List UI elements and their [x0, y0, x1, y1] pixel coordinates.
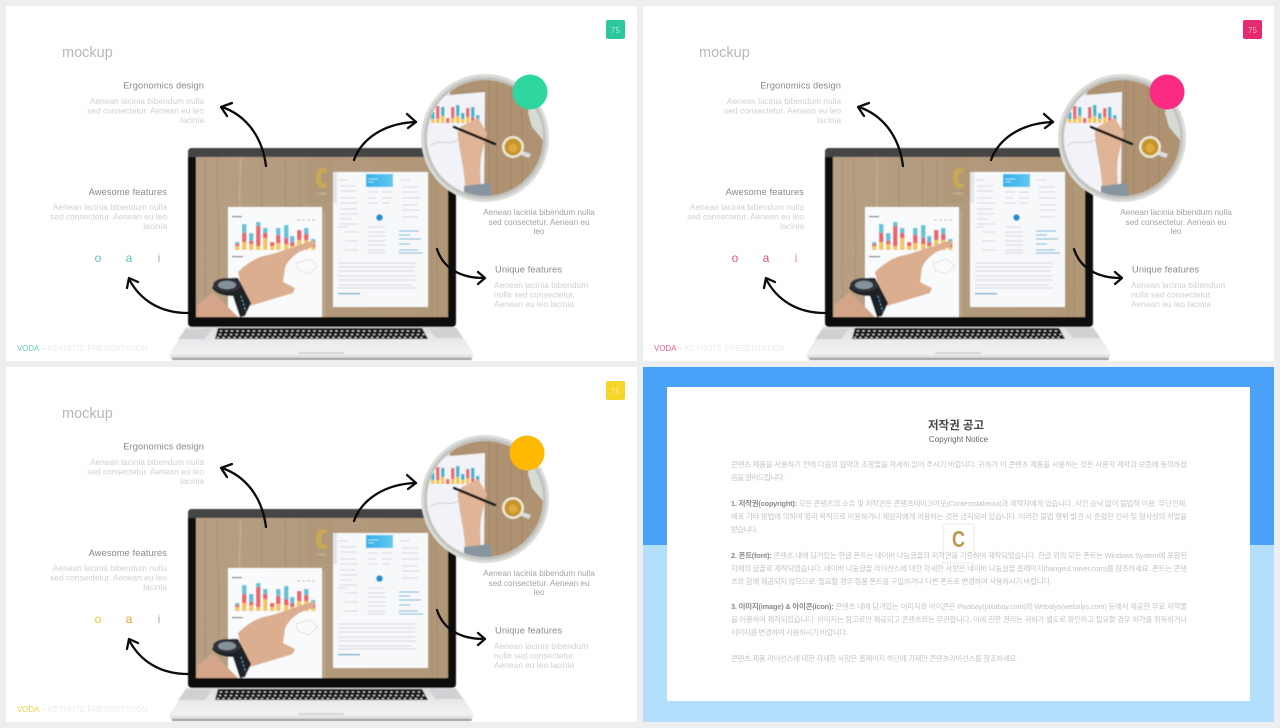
footer: VODA – KEYNOTE PRESENTATION	[17, 705, 148, 714]
text block: Unique features: Aenean eu leo lacinia	[494, 660, 574, 670]
text block: Ergonomics design: sed consectetur. Aenean eu leo	[87, 466, 204, 476]
caption under circle: sed consectetur. Aenean eu	[488, 218, 590, 227]
text block: Ergonomics design: sed consectetur. Aenean eu leo	[87, 106, 204, 116]
panel: slide 1 green	[6, 6, 637, 361]
text block: Awesome features: sed consectetur. Aenean eu leo	[50, 212, 167, 222]
page badge	[606, 20, 625, 39]
laptop mockup	[170, 148, 473, 360]
letters: o a i: o	[732, 251, 739, 265]
laptop mockup	[807, 148, 1110, 360]
text block: Awesome features: Aenean lacinia bibendum nulla	[690, 202, 804, 212]
notice body text: 배포 기타 방법에 의하여 영리 목적으로 이용하거나 제삼자에게 이용하는 것은 금지되어 있습니다. 이러한 불법 행위 발견 시 준엄한 민사 및 형사상의 처벌을	[731, 512, 1187, 521]
notice body text: 을 이용하여 제작되었습니다. 이미지는 참고로만 제공되고 콘텐츠와는 무관합니다. 이에 관한 권리는 귀하가 별도로 확인하고 필요할 경우 허가를 취득하거나	[731, 615, 1187, 624]
text block: Ergonomics design: Ergonomics design	[123, 442, 204, 452]
magnified circle	[1058, 74, 1186, 202]
laptop mockup	[170, 509, 473, 721]
text block: Ergonomics design: Aenean lacinia bibendum nulla	[727, 96, 841, 106]
title: mockup: mockup	[62, 406, 113, 422]
magnified circle	[421, 435, 549, 563]
notice heading: Copyright Notice	[929, 435, 989, 444]
text block: Awesome features: Awesome features	[89, 187, 167, 197]
notice body text: 츠와 함께 제공되지 않으므로, 필요할 경우 정품 폰트를 구입하거나 다른 폰트로 변경하여 사용하시기 바랍니다.	[731, 577, 1052, 586]
text block: Unique features: Aenean eu leo lacinia	[1131, 299, 1211, 309]
text block: Awesome features: Aenean lacinia bibendum nulla	[53, 202, 167, 212]
notice body text: 받습니다.	[731, 525, 758, 534]
text block: Unique features: nulla sed consectetur.	[494, 290, 575, 300]
letters: o a i	[95, 612, 160, 626]
text block: Awesome features: lacinia	[780, 221, 804, 231]
arrow: to Awesome features	[764, 278, 825, 313]
notice body text: 음을 알려드립니다.	[731, 473, 785, 482]
caption under circle	[483, 569, 595, 597]
notice body text	[731, 460, 1187, 663]
caption under circle: sed consectetur. Aenean eu	[488, 579, 590, 588]
text block: Ergonomics design	[87, 442, 204, 486]
title: mockup: mockup	[62, 45, 113, 61]
title: mockup: mockup	[699, 45, 750, 61]
page badge	[606, 381, 625, 400]
arrow: to Awesome features	[127, 278, 188, 313]
arrow: to magnified circle	[991, 114, 1053, 160]
page badge: 75	[611, 387, 620, 396]
caption under circle: leo	[1171, 227, 1182, 236]
watermark: C logo	[943, 524, 974, 563]
arrow: to magnified circle	[354, 114, 416, 160]
arrow: to Unique features	[437, 610, 485, 645]
page badge	[1243, 20, 1262, 39]
letters: o a i: i	[795, 251, 797, 265]
text block: Unique features: Aenean lacinia bibendum	[494, 641, 588, 651]
text block: Awesome features	[687, 187, 804, 231]
text block: Awesome features: Aenean lacinia bibendum nulla	[53, 563, 167, 573]
notice body text: 2. 폰트(font): 콘텐츠 내에 담겨있는 한글 폰트는 네이버 나눔글꼴의 저작권을 기증하여 제작되었습니다. 한글 외의 모든 폰트는 Windows System에 포함된	[731, 551, 1187, 560]
text block: Awesome features: Awesome features	[89, 548, 167, 558]
text block: Ergonomics design: Ergonomics design	[123, 80, 204, 90]
caption under circle: Aenean lacinia bibendum nulla	[1120, 208, 1232, 217]
notice body text: 1. 저작권(copyright): 모든 콘텐츠의 소유 및 저작권은 콘텐츠테이크아웃(Contentstakeout)과 제작자에게 있습니다. 사전 승낙 없이 불법적 이용, 무단전재,	[731, 499, 1187, 508]
caption under circle: sed consectetur. Aenean eu	[1125, 218, 1227, 227]
text block: Awesome features	[50, 548, 167, 592]
caption under circle: Aenean lacinia bibendum nulla	[483, 208, 595, 217]
page badge: 75	[1248, 26, 1257, 35]
text block: Unique features: nulla sed consectetur.	[1131, 290, 1212, 300]
letters: o a i: a	[126, 251, 133, 265]
text block: Awesome features	[50, 187, 167, 231]
arrow: to Awesome features	[127, 639, 188, 674]
watermark: C logo: C	[952, 526, 965, 552]
text block: Unique features: Aenean lacinia bibendum	[1131, 280, 1225, 290]
text block: Unique features	[1131, 264, 1225, 309]
text block: Ergonomics design	[87, 80, 204, 125]
accent dot	[512, 74, 548, 110]
letters: o a i: o	[95, 612, 102, 626]
text block: Awesome features: Awesome features	[726, 187, 804, 197]
panel: slide 2 pink	[643, 6, 1274, 361]
notice body text: 자체의 글꼴로 제작되었습니다. 네이버 나눔글꼴 라이선스에 대한 자세한 사항은 네이버 나눔글꼴 홈페이지(hangeul.naver.com)를 참조하세요. 폰트는 콘텐	[731, 564, 1187, 573]
letters: o a i: a	[763, 251, 770, 265]
caption under circle: leo	[534, 227, 545, 236]
text block: Unique features: Unique features	[495, 264, 562, 274]
text block: Ergonomics design: lacinia	[180, 115, 204, 125]
magnified circle	[421, 74, 549, 202]
letters: o a i: o	[95, 251, 102, 265]
footer: VODA – KEYNOTE PRESENTATION	[17, 344, 148, 353]
arrow: to Unique features	[1074, 249, 1122, 284]
notice heading	[928, 418, 989, 444]
accent dot	[1150, 74, 1184, 110]
text block: Ergonomics design: lacinia	[180, 476, 204, 486]
page badge: 75	[611, 26, 620, 35]
notice body text: 콘텐츠 제품 라이선스에 대한 자세한 사항은 홈페이지 하단에 기재한 콘텐츠라이선스를 참조하세요.	[731, 654, 1018, 663]
arrow: to Ergonomics design	[221, 464, 266, 527]
text block: Unique features: nulla sed consectetur.	[494, 650, 575, 660]
letters: o a i: i	[158, 612, 160, 626]
text block: Ergonomics design: Aenean lacinia bibendum nulla	[90, 457, 204, 467]
panel: copyright notice	[643, 367, 1274, 722]
text block: Ergonomics design: Aenean lacinia bibendum nulla	[90, 96, 204, 106]
text block: Unique features: Unique features	[1132, 264, 1199, 274]
notice body text: 이미지를 변경하여 사용하시기 바랍니다.	[731, 628, 848, 637]
text block: Ergonomics design: sed consectetur. Aenean eu leo	[724, 106, 841, 116]
text block: Awesome features: sed consectetur. Aenean eu leo	[687, 212, 804, 222]
text block: Ergonomics design	[724, 80, 841, 125]
arrow: to Ergonomics design	[858, 103, 903, 166]
caption under circle: leo	[534, 588, 545, 597]
footer: VODA – KEYNOTE PRESENTATION	[654, 344, 785, 353]
text block: Awesome features: lacinia	[143, 221, 167, 231]
text block: Awesome features: lacinia	[143, 582, 167, 592]
panel: slide 3 yellow	[6, 367, 637, 722]
notice heading: 저작권 공고	[928, 418, 984, 432]
caption under circle	[1120, 208, 1232, 236]
text block: Unique features	[494, 626, 588, 670]
letters: o a i	[732, 251, 797, 265]
arrow: to Ergonomics design	[221, 103, 266, 166]
arrow: to magnified circle	[354, 475, 416, 521]
text block: Ergonomics design: lacinia	[817, 115, 841, 125]
text block: Ergonomics design: Ergonomics design	[760, 80, 841, 90]
text block: Awesome features: sed consectetur. Aenean eu leo	[50, 572, 167, 582]
text block: Unique features: Aenean eu leo lacinia	[494, 299, 574, 309]
caption under circle	[483, 208, 595, 236]
letters: o a i: i	[158, 251, 160, 265]
caption under circle: Aenean lacinia bibendum nulla	[483, 569, 595, 578]
arrow: to Unique features	[437, 249, 485, 284]
letters: o a i	[95, 251, 160, 265]
text block: Unique features: Aenean lacinia bibendum	[494, 280, 588, 290]
text block: Unique features: Unique features	[495, 626, 562, 636]
text block: Unique features	[494, 264, 588, 309]
accent dot	[510, 436, 544, 470]
notice body text: 3. 이미지(image) & 아이콘(icon): 콘텐츠 내에 담겨있는 이미지와 아이콘은 Pixabay(pixabay.com)와 Webalys(webalys.com) 등에서 제공한 무료 저작물	[731, 602, 1187, 611]
letters: o a i: a	[126, 612, 133, 626]
notice body text: 콘텐츠 제품을 사용하기 전에 다음의 협약과 조항들을 자세히 읽어 주시기 바랍니다. 귀하가 이 콘텐츠 제품을 사용하는 것은 사용자 계약과 보증에 동의하셨	[731, 460, 1187, 469]
